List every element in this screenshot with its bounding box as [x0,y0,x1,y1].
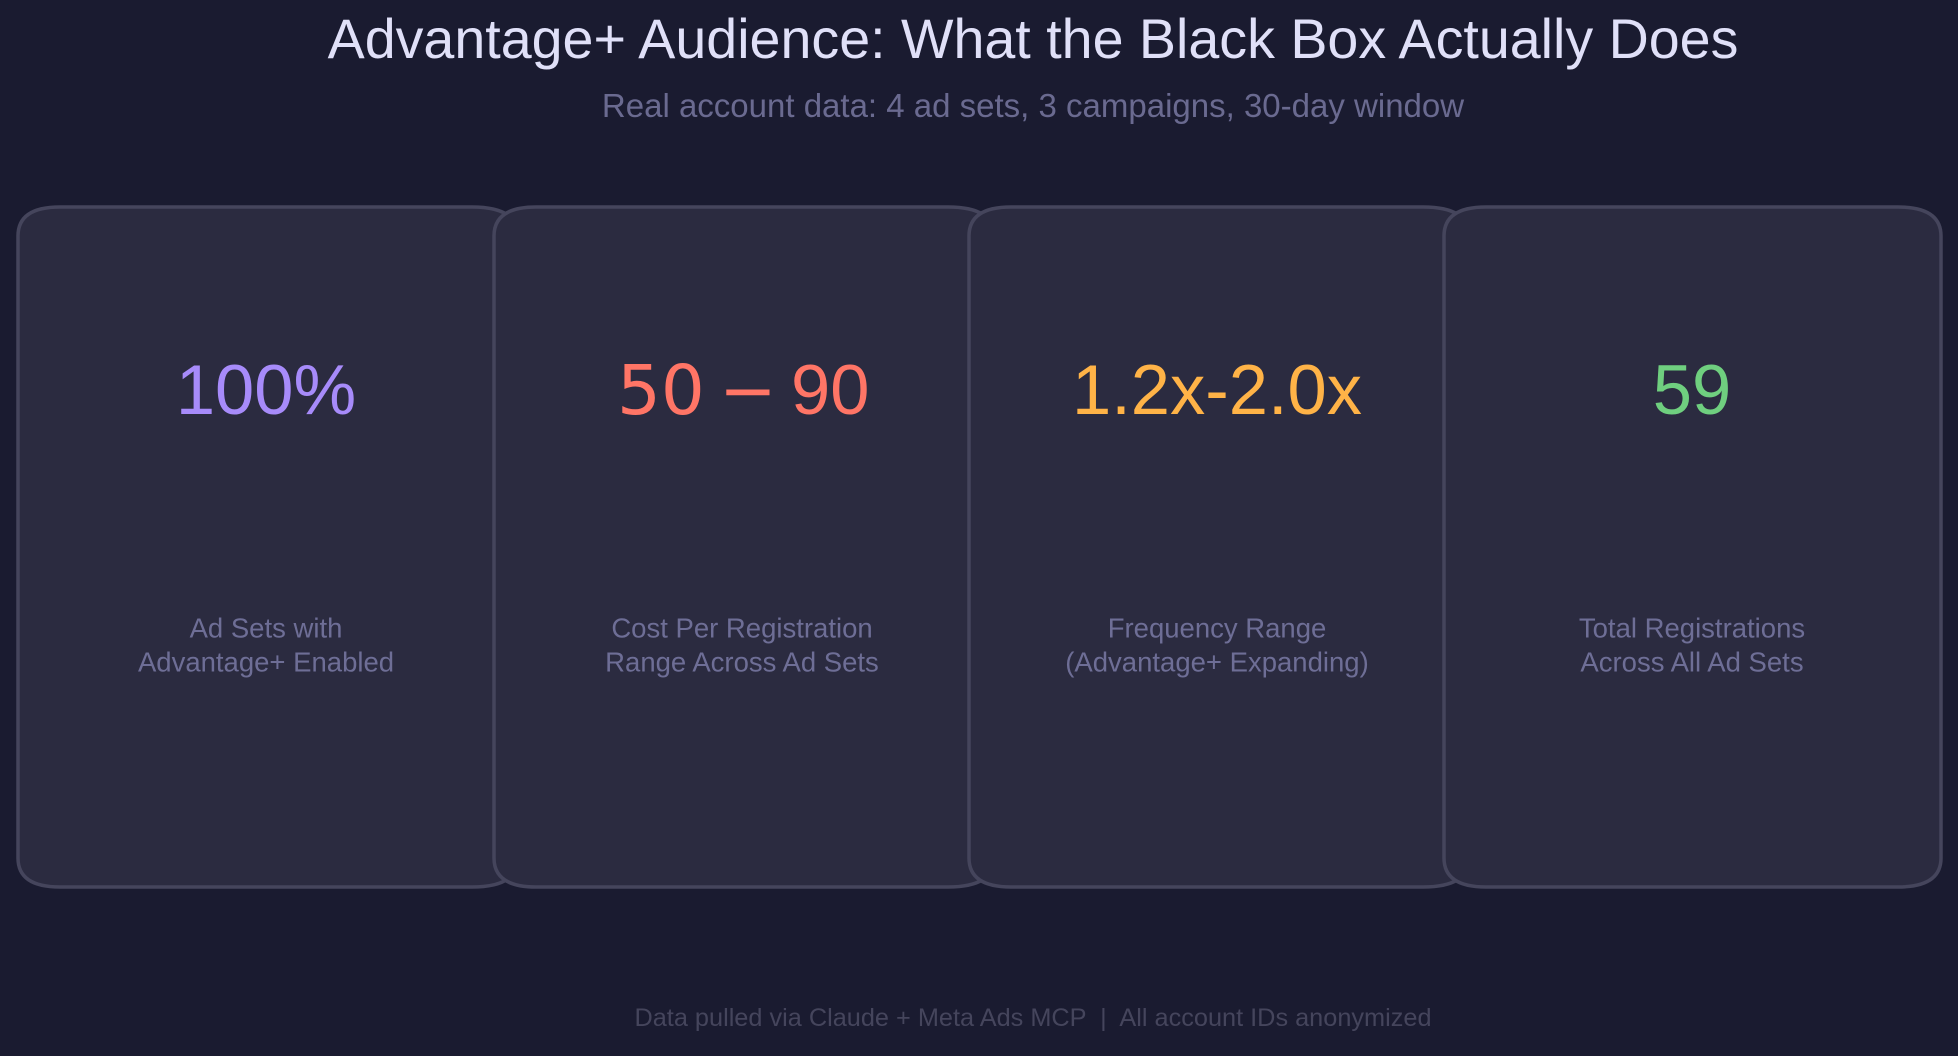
stat label: Cost Per Registration [611,612,873,644]
stat value: 1.2x-2.0x: 1.2x-2.0x [1072,350,1362,429]
stat label: Advantage+ Enabled [138,646,394,678]
stat value: 50 – 90: − [719,351,799,431]
stat label: Ad Sets with [190,612,342,644]
subtitle: Real account data: 4 ad sets, 3 campaigns, 30-day window [602,87,1464,124]
panel: frequency range [969,207,1469,887]
stat label: Range Across Ad Sets [605,646,879,678]
stat value: 50 – 90: 50 [617,351,727,431]
stat value: 59: 59 [1653,350,1731,429]
card background 2 [494,207,994,887]
panel: ad sets with Advantage+ enabled [18,207,518,887]
panel: total registrations [1444,207,1941,887]
stat label: Total Registrations [1579,612,1805,644]
stat label: (Advantage+ Expanding) [1065,646,1369,678]
stat label: Across All Ad Sets [1580,646,1804,678]
stat value: 50 – 90: 90 [791,350,869,429]
card background 3 [969,207,1469,887]
stat label: Frequency Range [1108,612,1326,644]
panel: cost per registration [494,207,994,887]
footer note: Data pulled via Claude + Meta Ads MCP | All account IDs anonymized [634,1004,1432,1032]
card background 1 [18,207,518,887]
stat value: 100%: 100% [176,350,356,429]
title: Advantage+ Audience: What the Black Box Actually Does [328,8,1738,70]
card background 4 [1444,207,1941,887]
